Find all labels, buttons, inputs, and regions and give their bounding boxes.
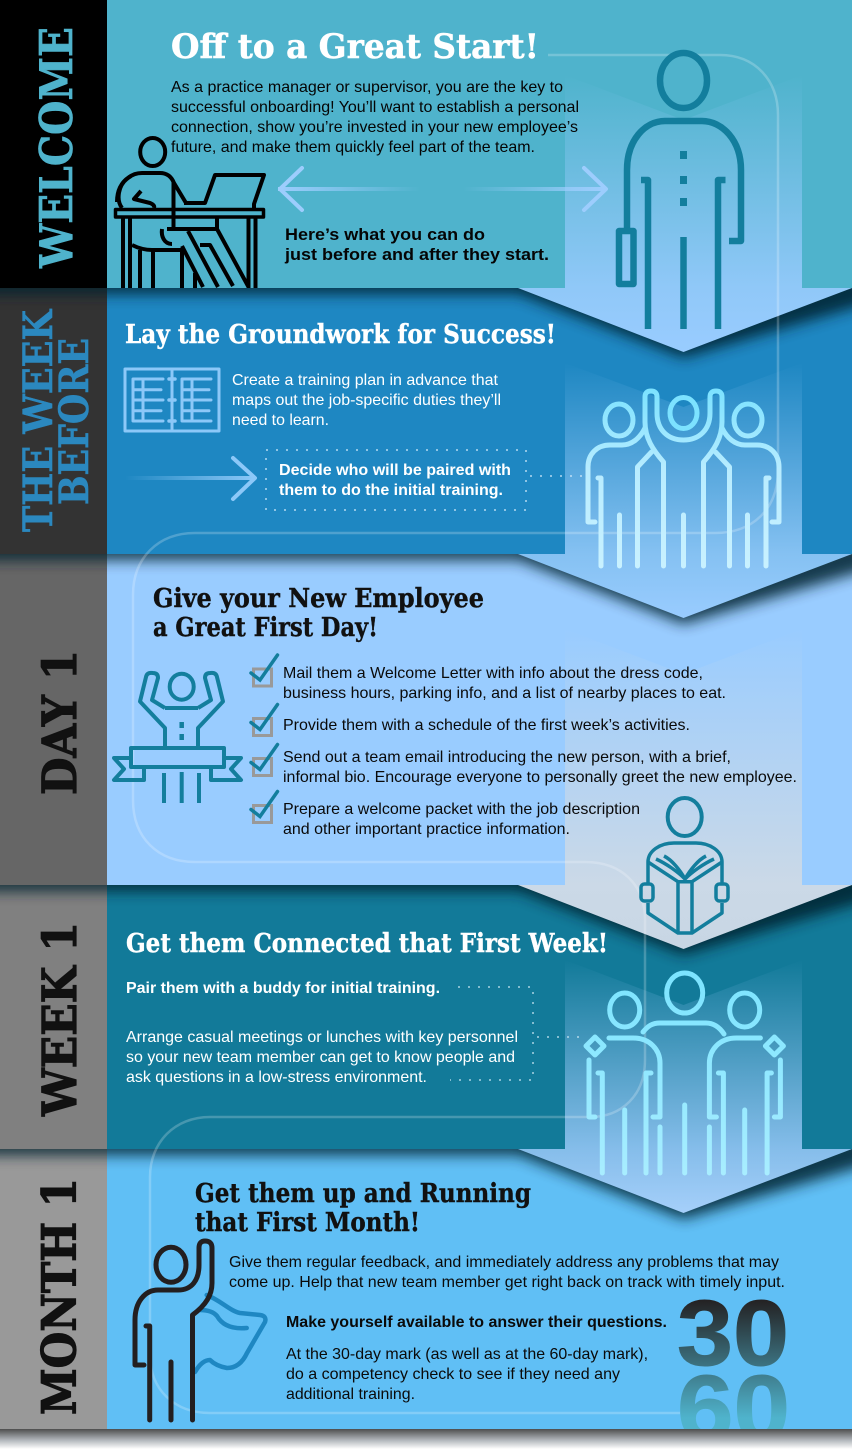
text block: welcome intro: future, and make them quickly feel part of the team. (171, 139, 535, 156)
text block: day 1 tasks: Provide them with a schedule of the first week’s activities. (283, 717, 690, 734)
side tab: week 1 (0, 885, 107, 1149)
chevron arrow: week before into day 1 (0, 542, 852, 624)
callout: be available: Make yourself available to answer their questions. (286, 1314, 667, 1331)
chevron arrow: welcome into week before (0, 276, 852, 358)
checkbox 4 (251, 792, 278, 822)
figure (135, 1241, 212, 1420)
numbers: 30 and 60 day marks: 30 (677, 1281, 789, 1385)
text block: day 1 tasks: Mail them a Welcome Letter with info about the dress code, (283, 665, 703, 682)
chevron arrow: day 1 into week 1 (0, 873, 852, 955)
text block: competency check: do a competency check to see if they need any (286, 1366, 620, 1383)
heading: get them up and running: that First Month! (195, 1208, 420, 1238)
heading: get them connected: Get them Connected that First Week! (126, 929, 608, 959)
title: off to a great start: Off to a Great Start! (171, 27, 539, 67)
text block: feedback: come up. Help that new team member get right back on track with timely input. (229, 1274, 785, 1291)
serpentine outline connecting the panels (133, 55, 778, 1413)
text block: training plan: maps out the job-specific duties they’ll (232, 392, 501, 409)
checkbox 3 (251, 744, 278, 776)
icon: three connected team members (586, 973, 783, 1173)
callout: what you can do: Here’s what you can do (285, 225, 485, 244)
text block: competency check: At the 30-day mark (as well as at the 60-day mark), (286, 1346, 648, 1363)
text block: welcome intro (171, 79, 579, 156)
text block: day 1 tasks: Prepare a welcome packet with the job description (283, 801, 640, 818)
callout: training pair: Decide who will be paired with (279, 462, 511, 479)
dotted callout box (266, 450, 585, 510)
side tab: the week before: BEFORE (51, 338, 98, 505)
heading: give your new employee: a Great First Day! (153, 613, 378, 643)
side tab: welcome (0, 0, 107, 288)
side tab: welcome: WELCOME (30, 27, 83, 269)
text block: feedback (229, 1254, 785, 1291)
chevron arrow: week 1 into month 1 (0, 1137, 852, 1219)
heading: get them up and running: Get them up and Running (195, 1179, 531, 1209)
text block: training plan: need to learn. (232, 412, 329, 429)
callout: training pair (279, 462, 511, 499)
panel: month 1 background (107, 1149, 852, 1429)
icon: person working at desk with laptop (116, 138, 264, 288)
footer shadow band (0, 1429, 852, 1449)
checklist: day 1 tasks (251, 655, 278, 822)
text block: casual meetings (126, 1029, 518, 1086)
side tab: day 1: DAY 1 (33, 650, 88, 795)
panel: the week before background (107, 288, 852, 554)
text block: day 1 tasks: business hours, parking info, and a list of nearby places to eat. (283, 685, 726, 702)
arrow: to training pair note (125, 458, 255, 499)
text block: day 1 tasks: Send out a team email introducing the new person, with a brief, (283, 749, 731, 766)
text block: day 1 tasks (283, 665, 797, 838)
callout: what you can do (284, 225, 549, 264)
text block: welcome intro: As a practice manager or supervisor, you are the key to (171, 79, 563, 96)
numbers: 30 and 60 day marks (678, 1300, 786, 1429)
double arrow: manager to employee (278, 168, 606, 210)
icon: person reading a book (641, 798, 728, 933)
heading: give your new employee: Give your New Employee (153, 584, 484, 614)
side tab: the week before: THE WEEK (15, 309, 62, 532)
checkbox 2 (251, 704, 278, 736)
text block: feedback: Give them regular feedback, and immediately address any problems that may (229, 1254, 779, 1271)
text block: day 1 tasks: and other important practice information. (283, 821, 570, 838)
side tab: day 1 (0, 554, 107, 885)
side tab: month 1: MONTH 1 (32, 1178, 88, 1415)
icon: training plan binder (125, 369, 219, 431)
dotted connector bracket (450, 987, 585, 1080)
side tab: month 1 (0, 1149, 107, 1429)
text block: day 1 tasks: informal bio. Encourage everyone to personally greet the new employee. (283, 769, 797, 786)
text block: casual meetings: ask questions in a low-stress environment. (126, 1069, 427, 1086)
cape (195, 1295, 265, 1372)
heading: get them up and running (195, 1179, 531, 1238)
text block: training plan (232, 372, 501, 429)
panel: welcome background (107, 0, 852, 288)
callout: what you can do: just before and after they start. (284, 245, 549, 264)
side tab: week 1: WEEK 1 (33, 922, 88, 1117)
panel: week 1 background (107, 885, 852, 1149)
text block: welcome intro: connection, show you’re invested in your new employee’s (171, 119, 578, 136)
text block: training plan: Create a training plan in advance that (232, 372, 499, 389)
icon: superhero with cape (135, 1241, 265, 1420)
text block: competency check: additional training. (286, 1386, 415, 1403)
text block: welcome intro: successful onboarding! You’ll want to establish a personal (171, 99, 579, 116)
icon: person with welcome banner (114, 673, 241, 803)
text block: competency check (286, 1346, 648, 1403)
heading: give your new employee (153, 584, 484, 643)
text block: casual meetings: so your new team member can get to know people and (126, 1049, 515, 1066)
callout: buddy: Pair them with a buddy for initial training. (126, 980, 440, 997)
icon: three people high five (588, 391, 779, 566)
checkbox 1 (251, 655, 278, 686)
text block: casual meetings: Arrange casual meetings or lunches with key personnel (126, 1029, 518, 1046)
panel: day 1 background (107, 554, 852, 885)
icon: new employee with briefcase (619, 53, 741, 329)
heading: lay the groundwork: Lay the Groundwork for Success! (125, 320, 556, 350)
side tab: the week before (0, 288, 107, 554)
callout: training pair: them to do the initial training. (279, 482, 503, 499)
